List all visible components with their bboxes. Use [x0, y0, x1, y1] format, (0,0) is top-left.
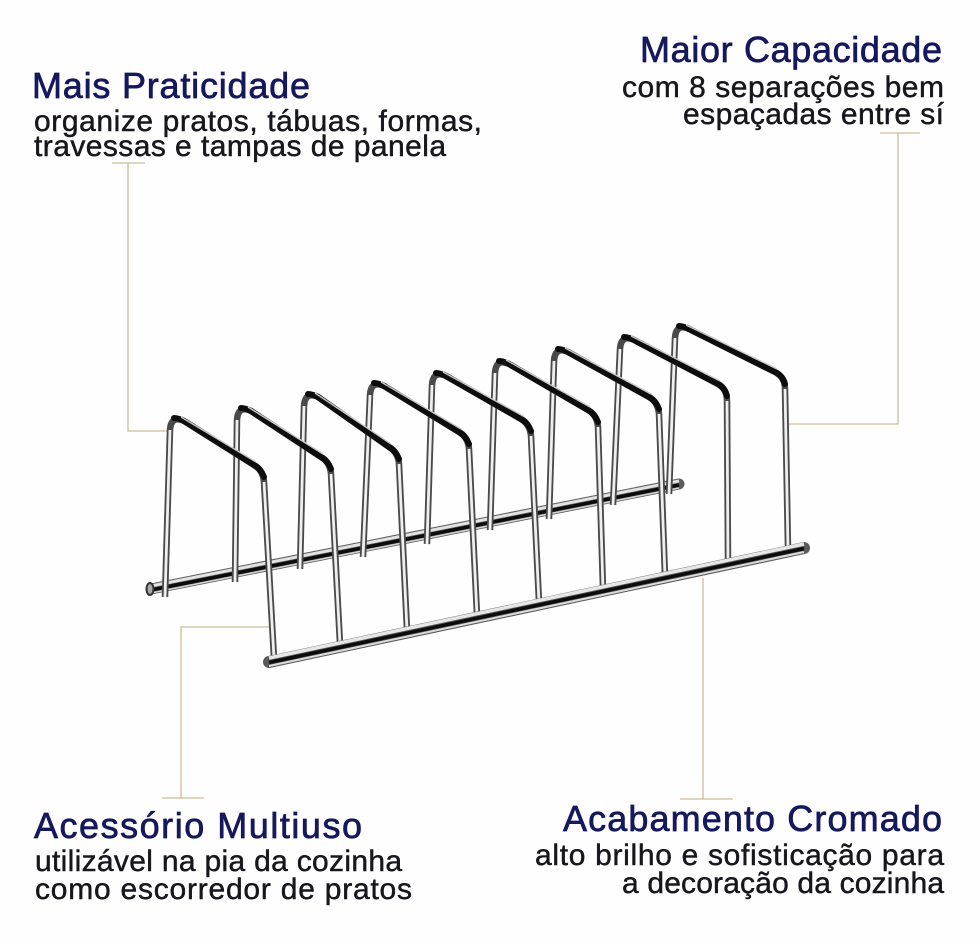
frame 5 [427, 372, 539, 602]
heading: Acabamento Cromado: Acabamento Cromado [563, 798, 942, 839]
back rail [146, 481, 679, 595]
leader line: Acessório Multiuso [162, 627, 270, 798]
frame 9 [669, 325, 788, 549]
heading: Mais Praticidade: Mais Praticidade [32, 65, 310, 106]
callout: Acabamento Cromado [535, 798, 944, 900]
frame 6 [490, 360, 603, 589]
text: com 8 separações: com 8 separações bem [622, 71, 944, 104]
frame 1 [165, 417, 274, 658]
frame 2 [235, 407, 340, 644]
text: travessas e tampas: travessas e tampas de panela [34, 130, 446, 163]
text: espaçadas entre sí: espaçadas entre sí [683, 98, 945, 131]
text: a decoração: a decoração da cozinha [622, 867, 944, 900]
callout: Mais Praticidade [32, 65, 482, 163]
heading: Acessório Multiuso: Acessório Multiuso [34, 805, 362, 846]
heading: Maior Capacidade: Maior Capacidade [640, 29, 942, 70]
frames 9 to 1, back to front [165, 325, 788, 658]
product: chrome rack [146, 325, 804, 666]
text: organize pratos: organize pratos, tábuas, formas, [34, 105, 482, 138]
text: como escorredor: como escorredor de pratos [35, 873, 412, 906]
leader line: Mais Praticidade [112, 163, 172, 431]
callout: Maior Capacidade [622, 29, 945, 131]
leader line: Acabamento Cromado [680, 578, 733, 799]
frame 7 [549, 348, 665, 576]
leader line: Maior Capacidade [788, 133, 920, 424]
frame 3 [300, 393, 407, 630]
frame 8 [613, 336, 728, 562]
text: utilizável na pia: utilizável na pia da cozinha [35, 845, 402, 878]
text: alto brilho: alto brilho e sofisticação para [535, 839, 944, 872]
front rail [269, 544, 804, 666]
frame 4 [363, 382, 477, 615]
callout: Acessório Multiuso [34, 805, 412, 906]
